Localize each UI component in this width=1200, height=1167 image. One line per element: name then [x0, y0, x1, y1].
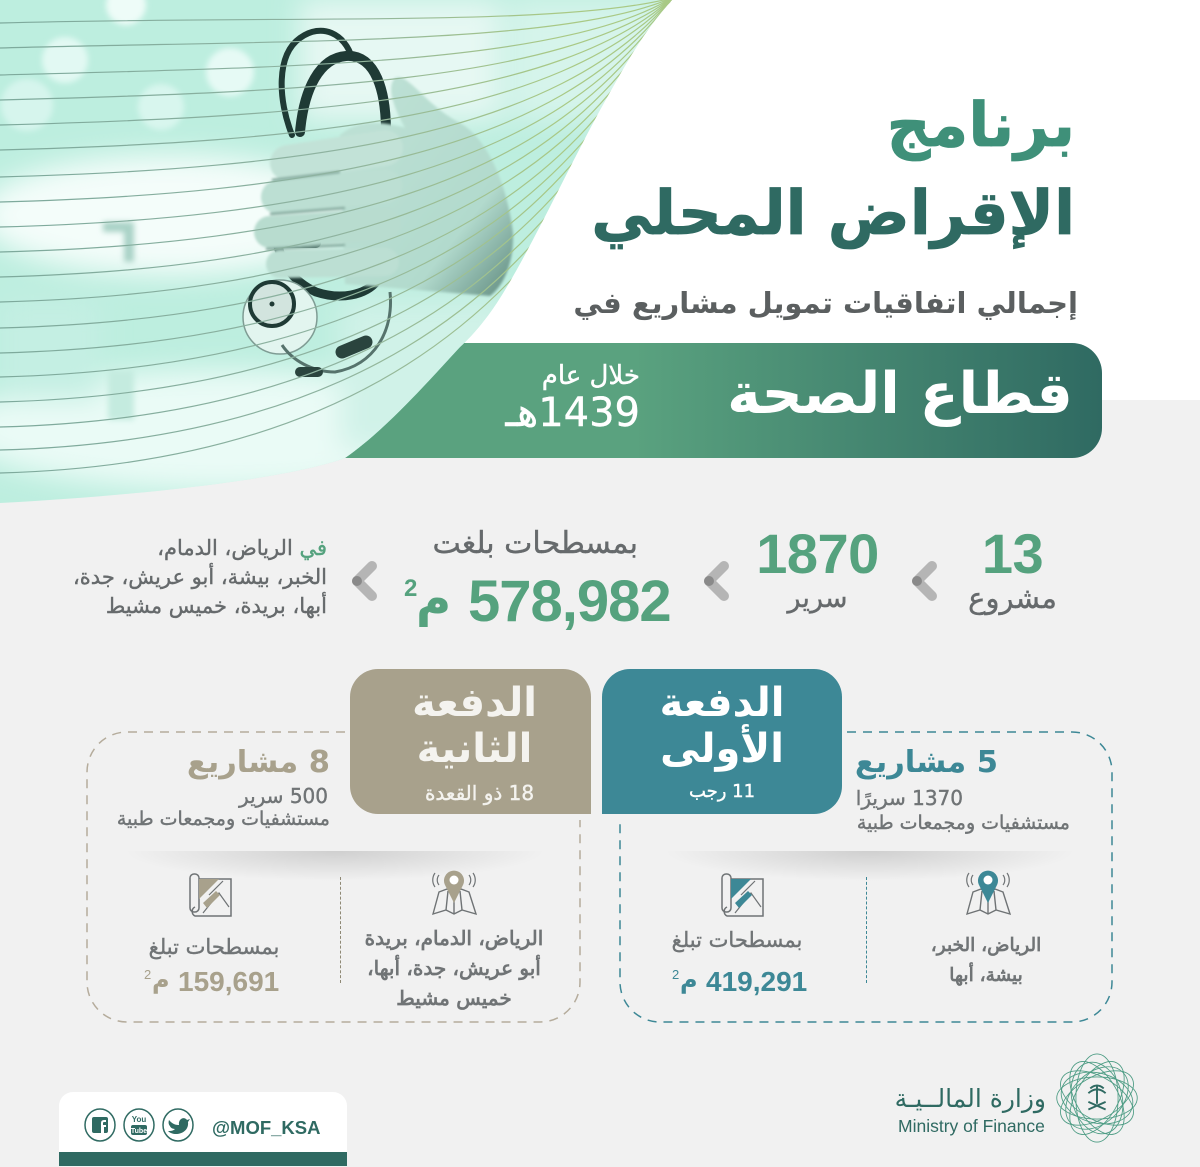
tab heading: الثانية	[417, 726, 532, 772]
project count: 5 مشاريع	[855, 745, 998, 780]
area value: 419,291	[706, 966, 807, 997]
stat: projects	[968, 522, 1057, 616]
panel: first batch	[602, 669, 1070, 997]
cities text	[73, 536, 327, 618]
tab heading	[412, 680, 537, 772]
area value: 578,982	[468, 569, 671, 634]
decorative fan of curved lines	[0, 0, 672, 473]
icon: map scroll	[189, 873, 232, 917]
project count: 8 مشاريع	[187, 745, 330, 780]
location text	[365, 926, 543, 1010]
shadow divider	[125, 851, 545, 881]
social card	[59, 1092, 347, 1166]
beds label: سرير	[788, 583, 847, 614]
subtitle: إجمالي اتفاقيات تمويل مشاريع في	[573, 286, 1078, 320]
cities text: أبها، بريدة، خميس مشيط	[106, 594, 327, 618]
banner year: 1439هـ	[505, 390, 640, 436]
cities text: في الرياض، الدمام،	[157, 536, 327, 560]
banner year label: خلال عام	[542, 361, 640, 391]
tab heading: الدفعة	[660, 680, 784, 726]
banner: sector	[250, 343, 1102, 458]
location text: أبو عريش، جدة، أبها،	[367, 956, 541, 980]
first batch tab	[602, 669, 842, 814]
area value: 2	[672, 967, 679, 982]
facilities: مستشفيات ومجمعات طبية	[857, 812, 1070, 834]
icon: map scroll	[721, 873, 764, 917]
title line 1: برنامج	[887, 90, 1075, 161]
tab date: 11 رجب	[689, 781, 755, 802]
beds count: 1370 سريرًا	[856, 786, 963, 810]
tab heading: الأولى	[660, 726, 784, 772]
projects number: 13	[982, 522, 1043, 585]
area label: بمسطحات تبلغ	[149, 935, 279, 959]
second batch tab	[350, 669, 591, 814]
tab heading	[660, 680, 784, 772]
vertical divider	[866, 877, 867, 983]
chevron	[704, 561, 729, 601]
stat: area	[404, 526, 671, 634]
shadow divider	[665, 851, 1075, 881]
facilities: مستشفيات ومجمعات طبية	[117, 808, 330, 830]
projects label: مشروع	[968, 581, 1057, 615]
ministry name english: Ministry of Finance	[898, 1116, 1045, 1136]
beds count: 500 سرير	[239, 784, 328, 808]
stat: beds	[756, 522, 879, 614]
vertical divider	[340, 877, 341, 983]
card footer bar	[59, 1152, 347, 1166]
location text	[931, 935, 1041, 986]
ministry name arabic: وزارة المالــيـة	[895, 1084, 1046, 1113]
area value: م	[680, 966, 698, 994]
icon: location map	[966, 870, 1011, 915]
location text: بيشة، أبها	[949, 965, 1023, 986]
social icons: You	[132, 1115, 146, 1124]
hand holding stethoscope	[243, 31, 513, 372]
location text: خميس مشيط	[396, 986, 512, 1010]
ministry logo	[1056, 1054, 1138, 1142]
area unit: م	[416, 571, 451, 627]
area label: بمسطحات بلغت	[432, 526, 638, 561]
location text: الرياض، الدمام، بريدة	[365, 926, 543, 950]
icon: location map	[432, 870, 477, 915]
panel: second batch	[117, 669, 591, 1010]
chevron	[352, 561, 377, 601]
handle: @MOF_KSA	[212, 1117, 320, 1138]
grey lower background	[0, 400, 1200, 1167]
location text: الرياض، الخبر،	[931, 935, 1041, 956]
social icons	[84, 1108, 194, 1142]
area value: م	[152, 966, 170, 994]
area label: بمسطحات تبلغ	[672, 928, 802, 952]
chevron	[912, 561, 937, 601]
social icons: Tube	[131, 1128, 147, 1135]
title line 2: الإقراض المحلي	[591, 178, 1075, 249]
tab heading: الدفعة	[412, 680, 537, 726]
area value: 2	[144, 967, 151, 982]
tab date: 18 ذو القعدة	[425, 781, 534, 805]
beds number: 1870	[756, 522, 879, 585]
area value: 159,691	[178, 966, 279, 997]
banner title: قطاع الصحة	[727, 361, 1073, 427]
photo backdrop	[0, 0, 700, 510]
area superscript: 2	[404, 575, 417, 602]
hero image: doctor holding stethoscope	[0, 0, 672, 503]
cities text: الخبر، بيشة، أبو عريش، جدة،	[73, 565, 327, 589]
